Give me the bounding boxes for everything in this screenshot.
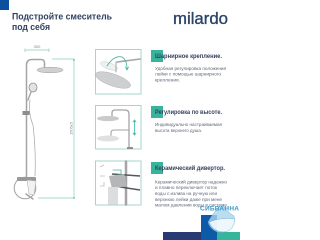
name: СИБВАННА <box>200 206 239 212</box>
pipes <box>112 110 129 148</box>
product drawing: shower system with dimensions <box>14 44 75 199</box>
mixer with hook ring <box>14 177 36 199</box>
footer bar: green <box>211 232 240 240</box>
width dimension <box>25 44 49 52</box>
panel: height image <box>96 106 141 149</box>
drop <box>208 204 234 232</box>
description: воды с излива на ручную или <box>155 191 217 196</box>
rotation arrow <box>107 57 128 70</box>
mixer body <box>109 174 127 189</box>
brand logo: milardo <box>173 10 228 28</box>
corner accent <box>0 0 9 10</box>
panel: hinge image <box>94 50 141 94</box>
shower head <box>37 67 63 73</box>
description: Керамический дивертор надежно <box>155 178 227 184</box>
hand shower <box>28 83 37 100</box>
heading: Шарнирное крепление. <box>155 53 222 60</box>
description: малом давлении воды в системе <box>155 202 227 208</box>
lever <box>108 187 118 204</box>
heading: Керамический дивертор. <box>155 165 225 172</box>
description: Индивидуально настраиваемая <box>155 122 222 127</box>
hose <box>29 100 35 176</box>
head <box>94 68 132 92</box>
base <box>127 147 133 149</box>
feature: height <box>151 106 222 133</box>
description: Удобная регулировка положения <box>155 66 227 71</box>
marker <box>151 50 163 62</box>
feature: hinge <box>151 50 227 82</box>
upper head <box>97 116 119 121</box>
title: под себя <box>12 22 50 32</box>
pipes <box>125 162 127 204</box>
height dimension: 1505±5 <box>68 121 74 135</box>
panel: diverter image <box>96 161 141 205</box>
teal arrow <box>113 170 121 175</box>
marker <box>151 106 163 118</box>
marker <box>151 162 163 174</box>
description: верхнюю лейки даже при мене <box>155 196 222 202</box>
bathtub <box>209 218 235 232</box>
description <box>155 178 227 208</box>
description: и плавно переключает поток <box>155 185 218 190</box>
small marks <box>100 165 105 186</box>
watermark logo <box>200 204 239 232</box>
title: Подстройте смеситель <box>12 12 112 22</box>
height arrow <box>133 120 136 135</box>
ghost head <box>99 60 119 72</box>
description: высота верхнего душа. <box>155 128 202 133</box>
footer bar: navy <box>163 232 211 240</box>
footer block: blue <box>201 215 217 240</box>
width dimension: 300 <box>34 44 41 49</box>
arm <box>117 59 140 62</box>
holder <box>22 111 30 115</box>
description <box>155 66 227 82</box>
description: крепления. <box>155 78 180 82</box>
feature: diverter <box>151 162 227 208</box>
title <box>12 12 112 32</box>
heading: Регулировка по высоте. <box>155 109 222 116</box>
height dimension <box>38 59 75 199</box>
description: лейки с помощью шарнирного <box>155 70 221 76</box>
mixer arms <box>112 174 140 190</box>
lower head <box>97 136 119 142</box>
riser pipe and arm <box>26 60 44 177</box>
description <box>155 122 222 133</box>
